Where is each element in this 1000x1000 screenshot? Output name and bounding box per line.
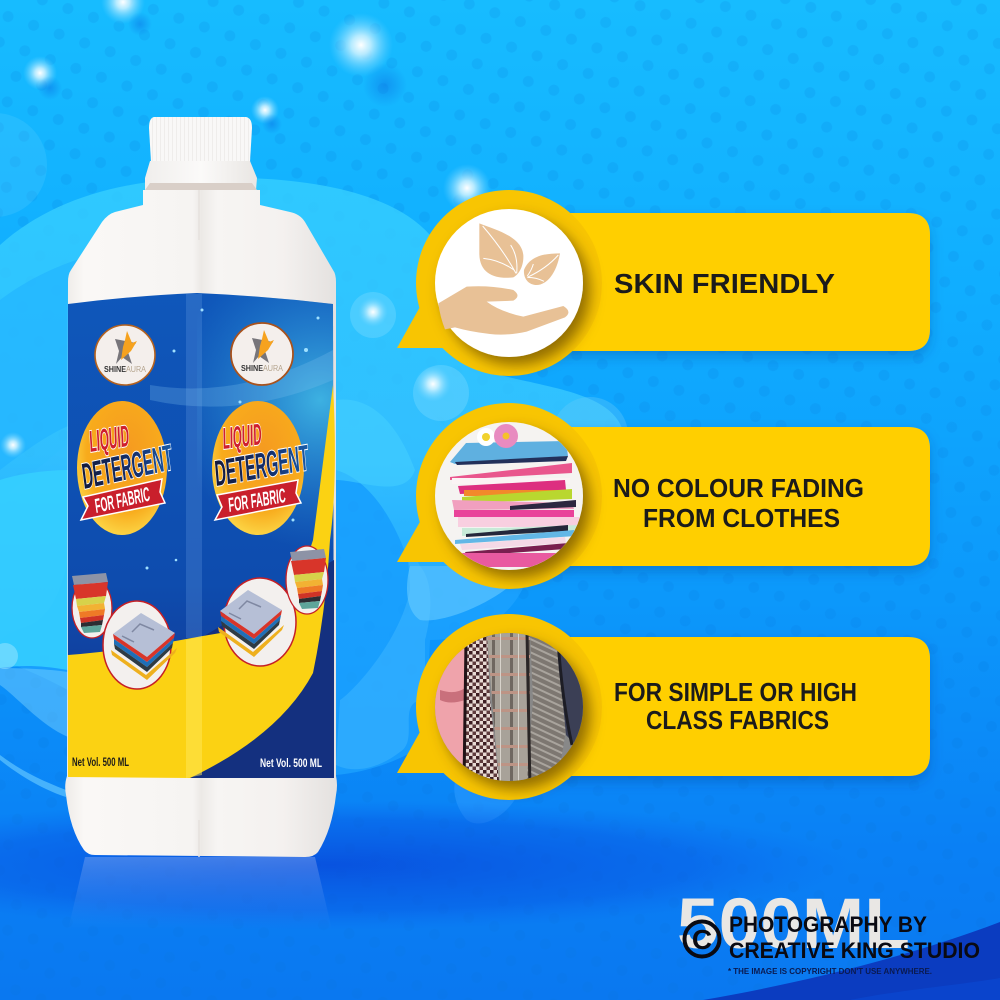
callout: simple or high class fabrics <box>397 614 930 800</box>
clothes right small <box>286 546 328 614</box>
photography watermark <box>684 912 980 976</box>
product bottle <box>65 117 337 857</box>
callout text: NO COLOUR FADING <box>613 473 864 503</box>
callout text: FROM CLOTHES <box>643 503 840 533</box>
bottle label <box>68 293 335 778</box>
watermark line two: CREATIVE KING STUDIO <box>729 938 980 963</box>
badge right: LIQUID <box>223 418 262 456</box>
badge left: FOR FABRIC <box>94 484 151 518</box>
copyright notice: * THE IMAGE IS COPYRIGHT DON'T USE ANYWHERE. <box>728 967 932 976</box>
floor shadow <box>0 800 1000 1000</box>
net volume left: Net Vol. 500 ML <box>72 755 129 769</box>
soap bubbles <box>0 0 491 669</box>
bottle cap <box>145 117 257 190</box>
yellow swoosh <box>68 385 335 778</box>
clothes right large <box>218 578 296 666</box>
logo right: SHINEAURA <box>241 364 284 373</box>
icon: hand and leaves <box>435 209 583 357</box>
volume heading: 500ML <box>677 885 910 964</box>
logo right <box>231 323 293 385</box>
badge left <box>77 401 175 535</box>
photo: folded colourful clothes <box>435 422 583 570</box>
callout shape <box>397 190 930 376</box>
bottle seam <box>198 190 200 857</box>
net volume right: Net Vol. 500 ML <box>260 756 322 770</box>
callout: skin friendly <box>397 190 930 376</box>
callout: no colour fading <box>397 403 930 589</box>
callout text: CLASS FABRICS <box>646 705 829 735</box>
callout text: FOR SIMPLE OR HIGH <box>614 677 857 707</box>
callout text: SKIN FRIENDLY <box>614 268 835 299</box>
badge left: LIQUID <box>89 420 130 459</box>
callout shape <box>397 403 930 589</box>
clothes left small <box>72 573 112 638</box>
callout text <box>613 473 864 533</box>
callout text <box>614 677 857 735</box>
bottle reflection <box>68 857 332 930</box>
bottle body <box>65 190 337 857</box>
star speckles <box>146 308 320 570</box>
bottle label: DETERGENT <box>80 436 175 497</box>
callout shape <box>397 614 930 800</box>
photo: fabrics <box>430 630 590 790</box>
icon: copyright: C <box>692 924 712 955</box>
icon: copyright <box>684 922 720 956</box>
bottle label: DETERGENT <box>213 437 310 494</box>
clothes left large <box>103 601 177 689</box>
water swirl background <box>0 113 628 823</box>
logo left <box>95 325 155 385</box>
badge right: FOR FABRIC <box>228 485 287 517</box>
logo left: SHINEAURA <box>104 365 147 374</box>
watermark line one: PHOTOGRAPHY BY <box>729 912 927 937</box>
badge right <box>212 401 310 535</box>
